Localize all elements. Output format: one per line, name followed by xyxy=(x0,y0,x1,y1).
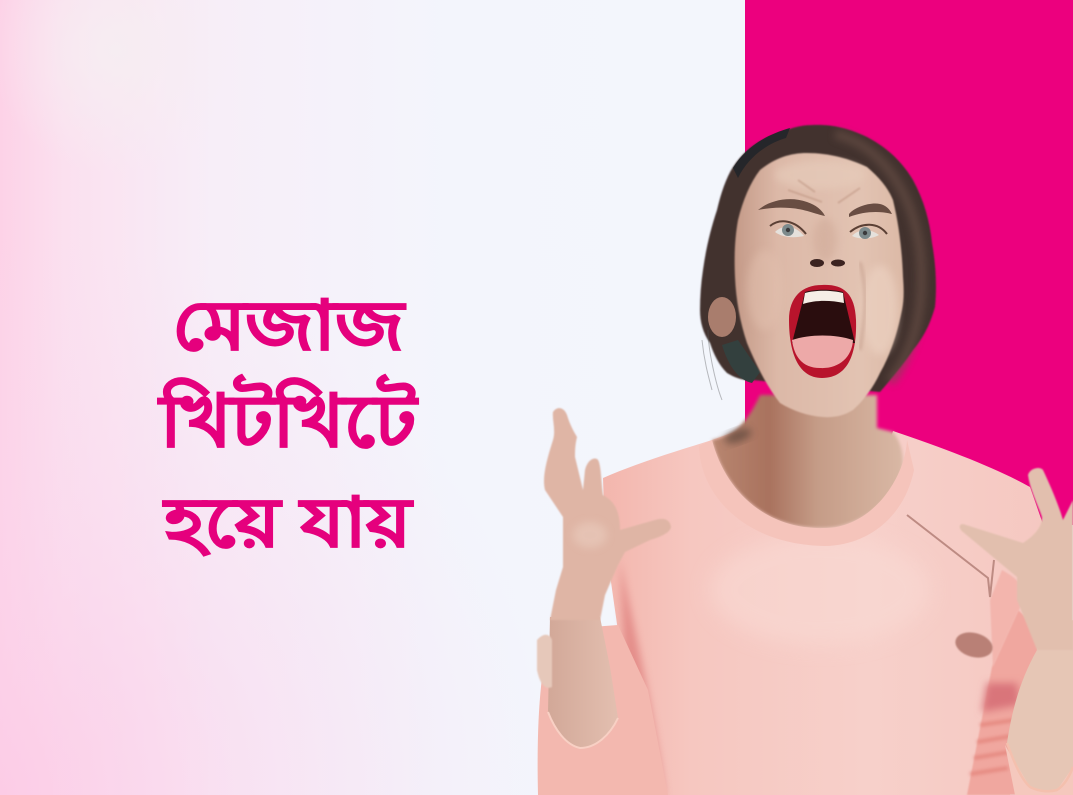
neck shadow xyxy=(723,426,753,446)
face xyxy=(735,153,904,417)
sweater collar xyxy=(699,440,914,546)
ear xyxy=(708,297,736,337)
sweater body xyxy=(603,428,1045,795)
right arm and hand xyxy=(960,468,1073,795)
eyes xyxy=(770,221,887,239)
headline text xyxy=(157,288,419,561)
nose xyxy=(810,218,845,267)
left arm and hand xyxy=(537,408,671,748)
magenta panel xyxy=(745,0,1073,525)
face shading xyxy=(747,161,898,355)
headline line 2: খিটখিটে xyxy=(157,374,419,462)
woman shouting xyxy=(537,125,1073,795)
neck xyxy=(712,395,903,528)
hair back xyxy=(700,125,936,400)
left sleeve xyxy=(538,625,668,795)
open mouth xyxy=(789,285,856,378)
headline line 3: হয়ে যায় xyxy=(163,485,413,561)
eyebrows xyxy=(758,199,892,217)
sweater shading xyxy=(620,515,1040,795)
headline line 1: মেজাজ xyxy=(172,288,406,364)
